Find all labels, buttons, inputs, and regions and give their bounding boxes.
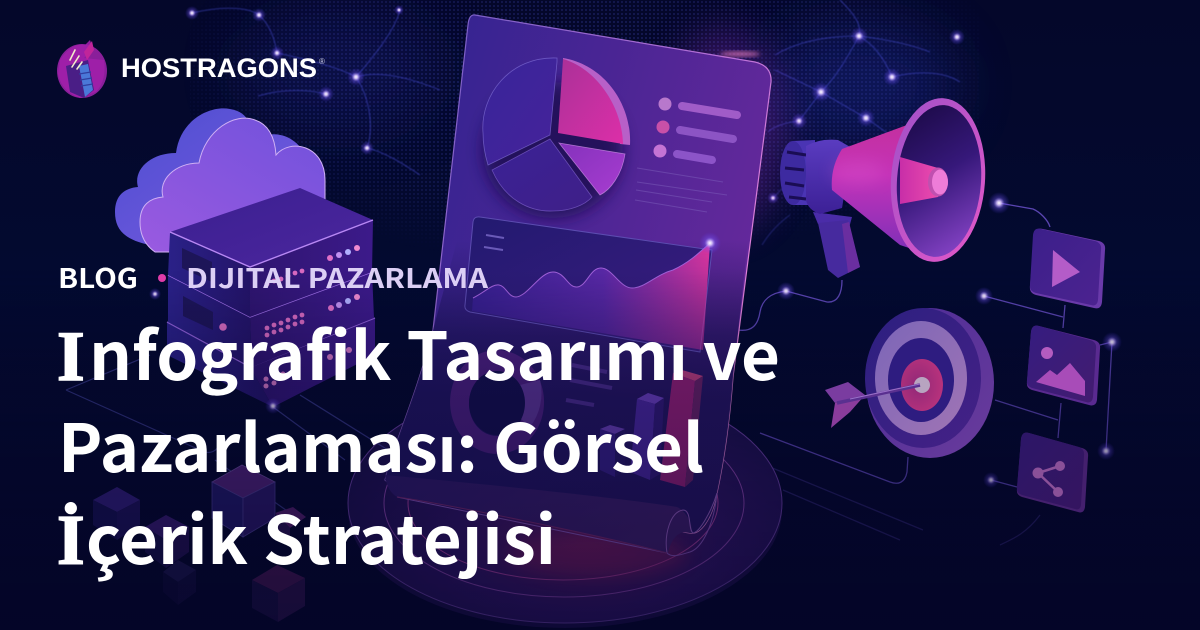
server unit 2 bbox=[168, 272, 374, 367]
bottom readability overlay bbox=[0, 270, 1200, 630]
glow behind document bbox=[665, 30, 785, 230]
registered mark: ® bbox=[319, 57, 325, 66]
title: I bbox=[57, 318, 85, 396]
area chart bbox=[472, 243, 710, 350]
pie chart bbox=[483, 58, 630, 218]
title: İ bbox=[57, 502, 85, 580]
server unit 1 bbox=[168, 188, 373, 317]
title: nfografik Tasarımı ve bbox=[89, 304, 780, 400]
isometric cubes bbox=[93, 465, 306, 622]
dotted world map and network bbox=[186, 0, 979, 246]
logo bbox=[57, 40, 325, 98]
title bbox=[57, 304, 780, 584]
faint text lines bbox=[635, 168, 727, 212]
separator dot bbox=[158, 274, 166, 282]
category label: DIJITAL PAZARLAMA bbox=[186, 257, 489, 296]
scroll roll bbox=[385, 475, 717, 556]
connector lines bbox=[738, 203, 1112, 545]
logo icon: dragon bbox=[57, 40, 107, 98]
report document bbox=[385, 15, 771, 556]
server floor lines bbox=[66, 355, 420, 520]
pie slice: light purple bbox=[559, 143, 625, 195]
title: Pazarlaması: Görsel bbox=[58, 396, 704, 492]
icon card: share bbox=[1017, 433, 1088, 512]
megaphone collar bbox=[806, 140, 852, 214]
lower document text lines bbox=[566, 365, 612, 405]
server unit 3 bbox=[167, 318, 375, 407]
line chart panel bbox=[465, 217, 721, 352]
server rack bbox=[66, 108, 420, 520]
icon card: play bbox=[1030, 229, 1105, 308]
pie slice: lower left bbox=[492, 139, 592, 211]
pie slice: pink bbox=[558, 58, 630, 145]
target bbox=[825, 308, 994, 458]
megaphone bell bbox=[832, 125, 915, 250]
connector nodes bbox=[777, 192, 1122, 488]
pie legend bbox=[654, 98, 737, 160]
server base node bbox=[265, 398, 281, 414]
blog label: BLOG bbox=[58, 257, 138, 296]
lower document donut bbox=[450, 350, 544, 454]
megaphone handle bbox=[813, 212, 860, 278]
megaphone rear cap bbox=[780, 140, 815, 205]
megaphone mouth bbox=[885, 95, 991, 265]
megaphone bbox=[780, 95, 991, 278]
category line bbox=[58, 257, 489, 296]
3D bar chart bbox=[600, 370, 703, 487]
icon card: image bbox=[1027, 326, 1100, 405]
title: çerik Stratejisi bbox=[86, 488, 556, 584]
lower document shading bbox=[385, 200, 748, 533]
logo wordmark: HOSTRAGONS bbox=[121, 53, 317, 83]
platform disc bbox=[348, 383, 782, 628]
status node bbox=[149, 288, 161, 300]
pie slice: upper left bbox=[483, 58, 557, 165]
arrow bbox=[825, 382, 920, 428]
cloud bbox=[115, 108, 325, 252]
document sheet bbox=[385, 15, 771, 533]
chart peak marker bbox=[699, 232, 721, 254]
